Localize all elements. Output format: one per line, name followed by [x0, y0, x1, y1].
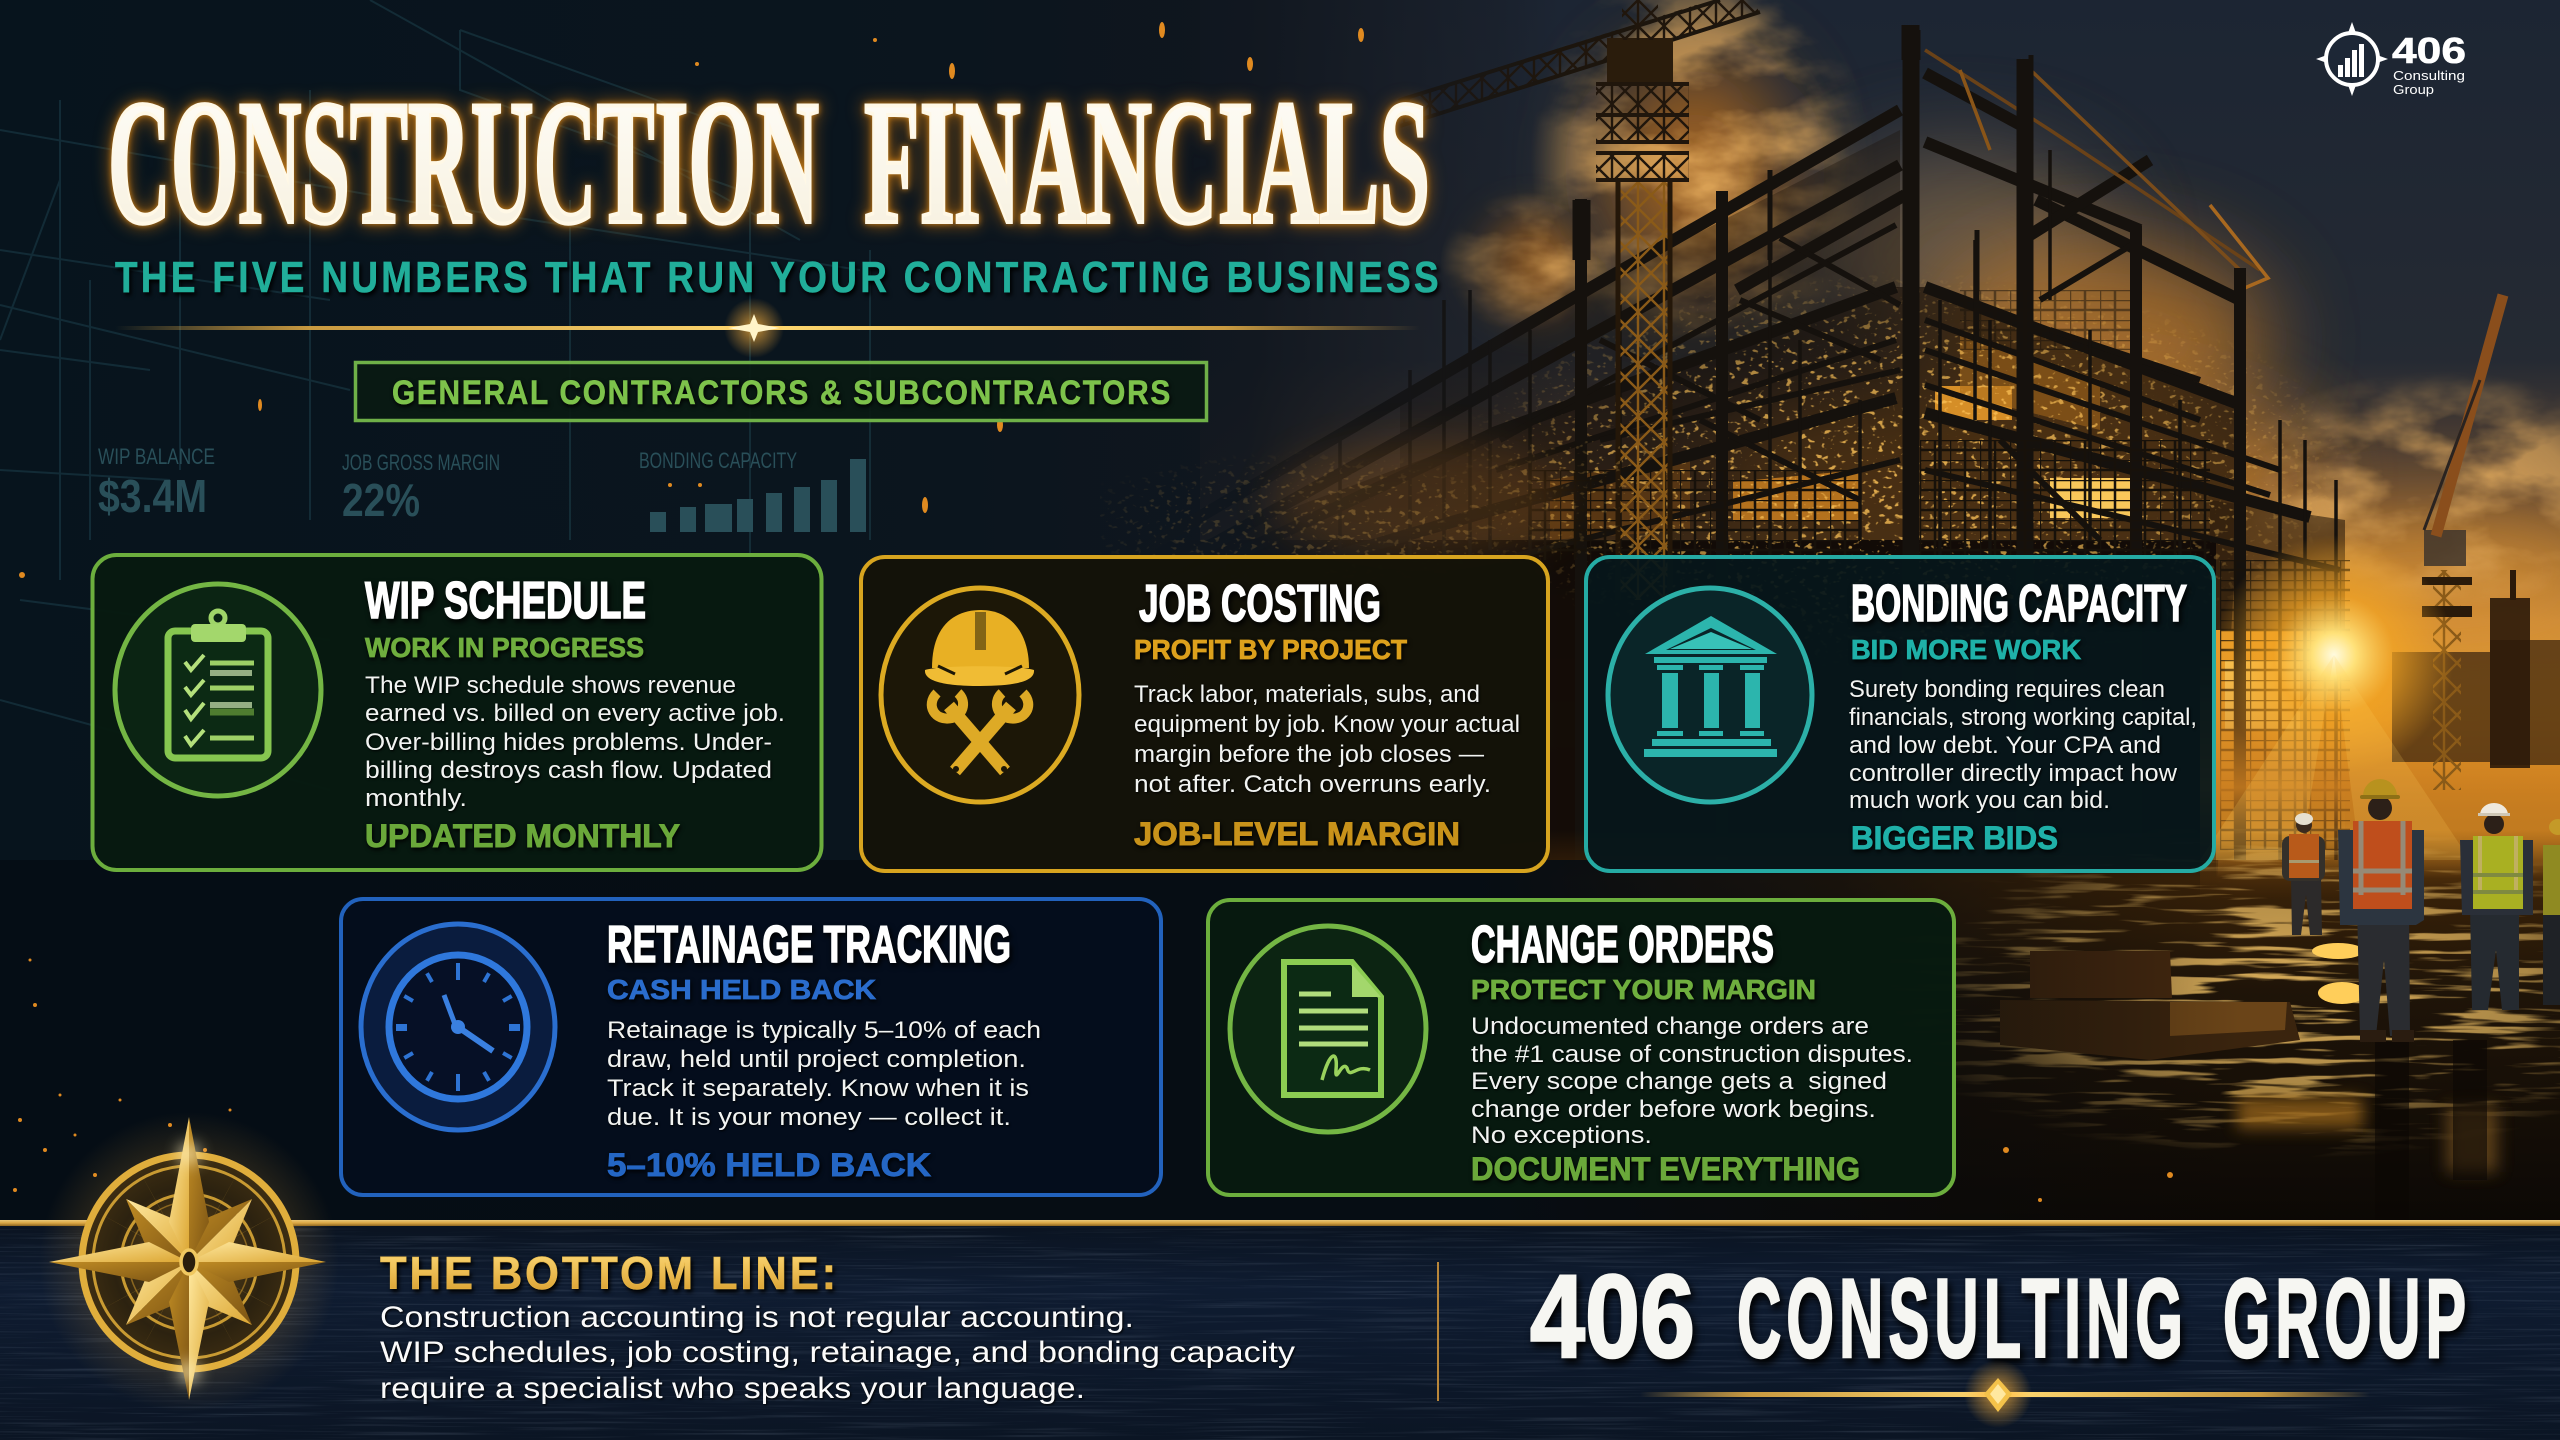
diagonal points: [126, 1199, 252, 1325]
body text: [365, 672, 785, 812]
subheading: cash held back: CASH HELD BACK: [607, 974, 876, 1005]
logo: 406 Consulting Group: Group: [2393, 82, 2434, 97]
tagline: updated monthly: UPDATED MONTHLY: [365, 818, 680, 854]
tagline: job-level margin: JOB-LEVEL MARGIN: [1134, 816, 1460, 852]
dashboard: job gross margin: [342, 450, 500, 526]
body text: [1471, 1013, 1913, 1149]
subtitle: THE FIVE NUMBERS THAT RUN YOUR CONTRACTING BUSINESS: [115, 253, 1442, 302]
dashboard: job gross margin: 22%: [342, 474, 420, 526]
dashboard: bonding capacity bars: [639, 448, 866, 532]
brand name: 406: [1530, 1251, 1695, 1383]
sun: [2200, 535, 2470, 860]
bottom line body: [380, 1301, 1295, 1405]
body text: and low debt. Your CPA and: [1849, 732, 2161, 759]
main title: FINANCIALS: [864, 63, 1430, 261]
body text: The WIP schedule shows revenue: [365, 672, 736, 699]
icon: signed document: [1230, 926, 1426, 1132]
body text: margin before the job closes —: [1134, 741, 1484, 768]
gold divider with star: [115, 298, 1420, 358]
body text: draw, held until project completion.: [607, 1046, 1026, 1073]
footer band: [0, 1220, 2560, 1440]
icon: gold compass rose: [39, 1112, 339, 1412]
body text: monthly.: [365, 785, 467, 812]
subheading: profit by project: PROFIT BY PROJECT: [1134, 634, 1407, 665]
body text: controller directly impact how: [1849, 760, 2178, 787]
icon: hard hat and crossed wrenches: [881, 588, 1079, 802]
body text: Track it separately. Know when it is: [607, 1075, 1029, 1102]
panel: change orders: [1208, 900, 1954, 1195]
body text: change order before work begins.: [1471, 1096, 1876, 1123]
subheading: bid more work: BID MORE WORK: [1851, 634, 2081, 665]
main title: CONSTRUCTION: [108, 63, 819, 261]
body text: No exceptions.: [1471, 1122, 1652, 1149]
right background crane: [2422, 295, 2503, 790]
left dark panel overlay: [0, 0, 1560, 1440]
logo: 406 Consulting Group: 406: [2392, 30, 2466, 71]
body text: Every scope change gets a signed: [1471, 1068, 1887, 1095]
brand name: [1530, 1251, 2471, 1383]
body text: not after. Catch overruns early.: [1134, 771, 1491, 798]
panel: job costing: [861, 557, 1548, 871]
logo: 406 Consulting Group: [2316, 22, 2466, 97]
blueprint lines and faded dashboard: [0, 0, 870, 790]
dashboard: WIP balance: WIP BALANCE: [98, 444, 215, 469]
workers in silhouette: [2282, 779, 2560, 1042]
dashboard: job gross margin: JOB GROSS MARGIN: [342, 450, 500, 475]
audience badge: GENERAL CONTRACTORS & SUBCONTRACTORS: [392, 374, 1172, 412]
body text: [1134, 681, 1520, 798]
icon: clipboard: [115, 584, 321, 796]
bottom line body: Construction accounting is not regular accounting.: [380, 1301, 1134, 1334]
body text: financials, strong working capital,: [1849, 704, 2197, 731]
sparks: [13, 22, 2173, 1202]
body text: Undocumented change orders are: [1471, 1013, 1869, 1040]
body text: earned vs. billed on every active job.: [365, 700, 785, 727]
background: steel-frame construction site at sunset: [1100, 0, 2560, 1220]
worker large, orange vest: [2338, 779, 2424, 1042]
brand name: CONSULTING: [1737, 1256, 2188, 1381]
panel: WIP schedule: [92, 555, 822, 870]
body text: Retainage is typically 5–10% of each: [607, 1017, 1041, 1044]
heading: change orders: CHANGE ORDERS: [1471, 916, 1774, 974]
subheading: protect your margin: PROTECT YOUR MARGIN: [1471, 974, 1816, 1005]
body text: the #1 cause of construction disputes.: [1471, 1041, 1913, 1068]
body text: due. It is your money — collect it.: [607, 1104, 1011, 1131]
tagline: bigger bids: BIGGER BIDS: [1851, 820, 2058, 856]
panel: retainage tracking: [341, 899, 1161, 1195]
tagline: document everything: DOCUMENT EVERYTHING: [1471, 1151, 1860, 1187]
body text: much work you can bid.: [1849, 787, 2110, 814]
cardinal points: [49, 1117, 326, 1400]
worker large, yellow vest: [2460, 803, 2533, 1010]
dashboard: WIP balance: $3.4M: [98, 470, 207, 522]
heading: job costing: JOB COSTING: [1139, 575, 1381, 633]
audience badge: [356, 362, 1206, 420]
glowing openings in steel structure: [1550, 330, 2345, 860]
logo: 406 Consulting Group: Consulting: [2393, 68, 2465, 83]
logo compass mark: [2316, 22, 2388, 96]
ground, mist and site: [1546, 570, 2560, 1220]
icon: clock: [361, 924, 555, 1130]
tagline: 5-10% held back: 5–10% HELD BACK: [607, 1147, 931, 1183]
panel: bonding capacity: [1586, 557, 2214, 871]
body text: Over-billing hides problems. Under-: [365, 729, 772, 756]
heading: bonding capacity: BONDING CAPACITY: [1851, 575, 2187, 633]
orange flecks in structure: [1266, 276, 2331, 606]
vertical separator: [1437, 1262, 1439, 1401]
worker at edge: [2543, 819, 2560, 1005]
heading: retainage tracking: RETAINAGE TRACKING: [607, 916, 1011, 974]
bottom line body: require a specialist who speaks your language.: [380, 1372, 1085, 1405]
body text: equipment by job. Know your actual: [1134, 711, 1520, 738]
subheading: work in progress: WORK IN PROGRESS: [365, 632, 644, 663]
body text: Surety bonding requires clean: [1849, 676, 2165, 703]
tower crane left: [1400, 0, 1760, 600]
body text: [1849, 676, 2197, 814]
brand divider with diamond: [1640, 1360, 2370, 1428]
worker small, orange vest: [2282, 813, 2325, 935]
icon: bank building: [1608, 588, 1812, 802]
dark building mass: [1126, 130, 2345, 900]
steel building frame: [1126, 25, 2350, 900]
bottom line body: WIP schedules, job costing, retainage, and bonding capacity: [380, 1336, 1295, 1369]
dashboard: bonding capacity bars: BONDING CAPACITY: [639, 448, 797, 473]
bottom line heading: THE BOTTOM LINE:: [380, 1247, 839, 1299]
body text: [607, 1017, 1041, 1131]
body text: billing destroys cash flow. Updated: [365, 757, 772, 784]
minor points: [97, 1170, 281, 1354]
body text: Track labor, materials, subs, and: [1134, 681, 1480, 708]
heading: WIP schedule: WIP SCHEDULE: [365, 572, 646, 630]
dashboard: WIP balance: [98, 444, 215, 522]
